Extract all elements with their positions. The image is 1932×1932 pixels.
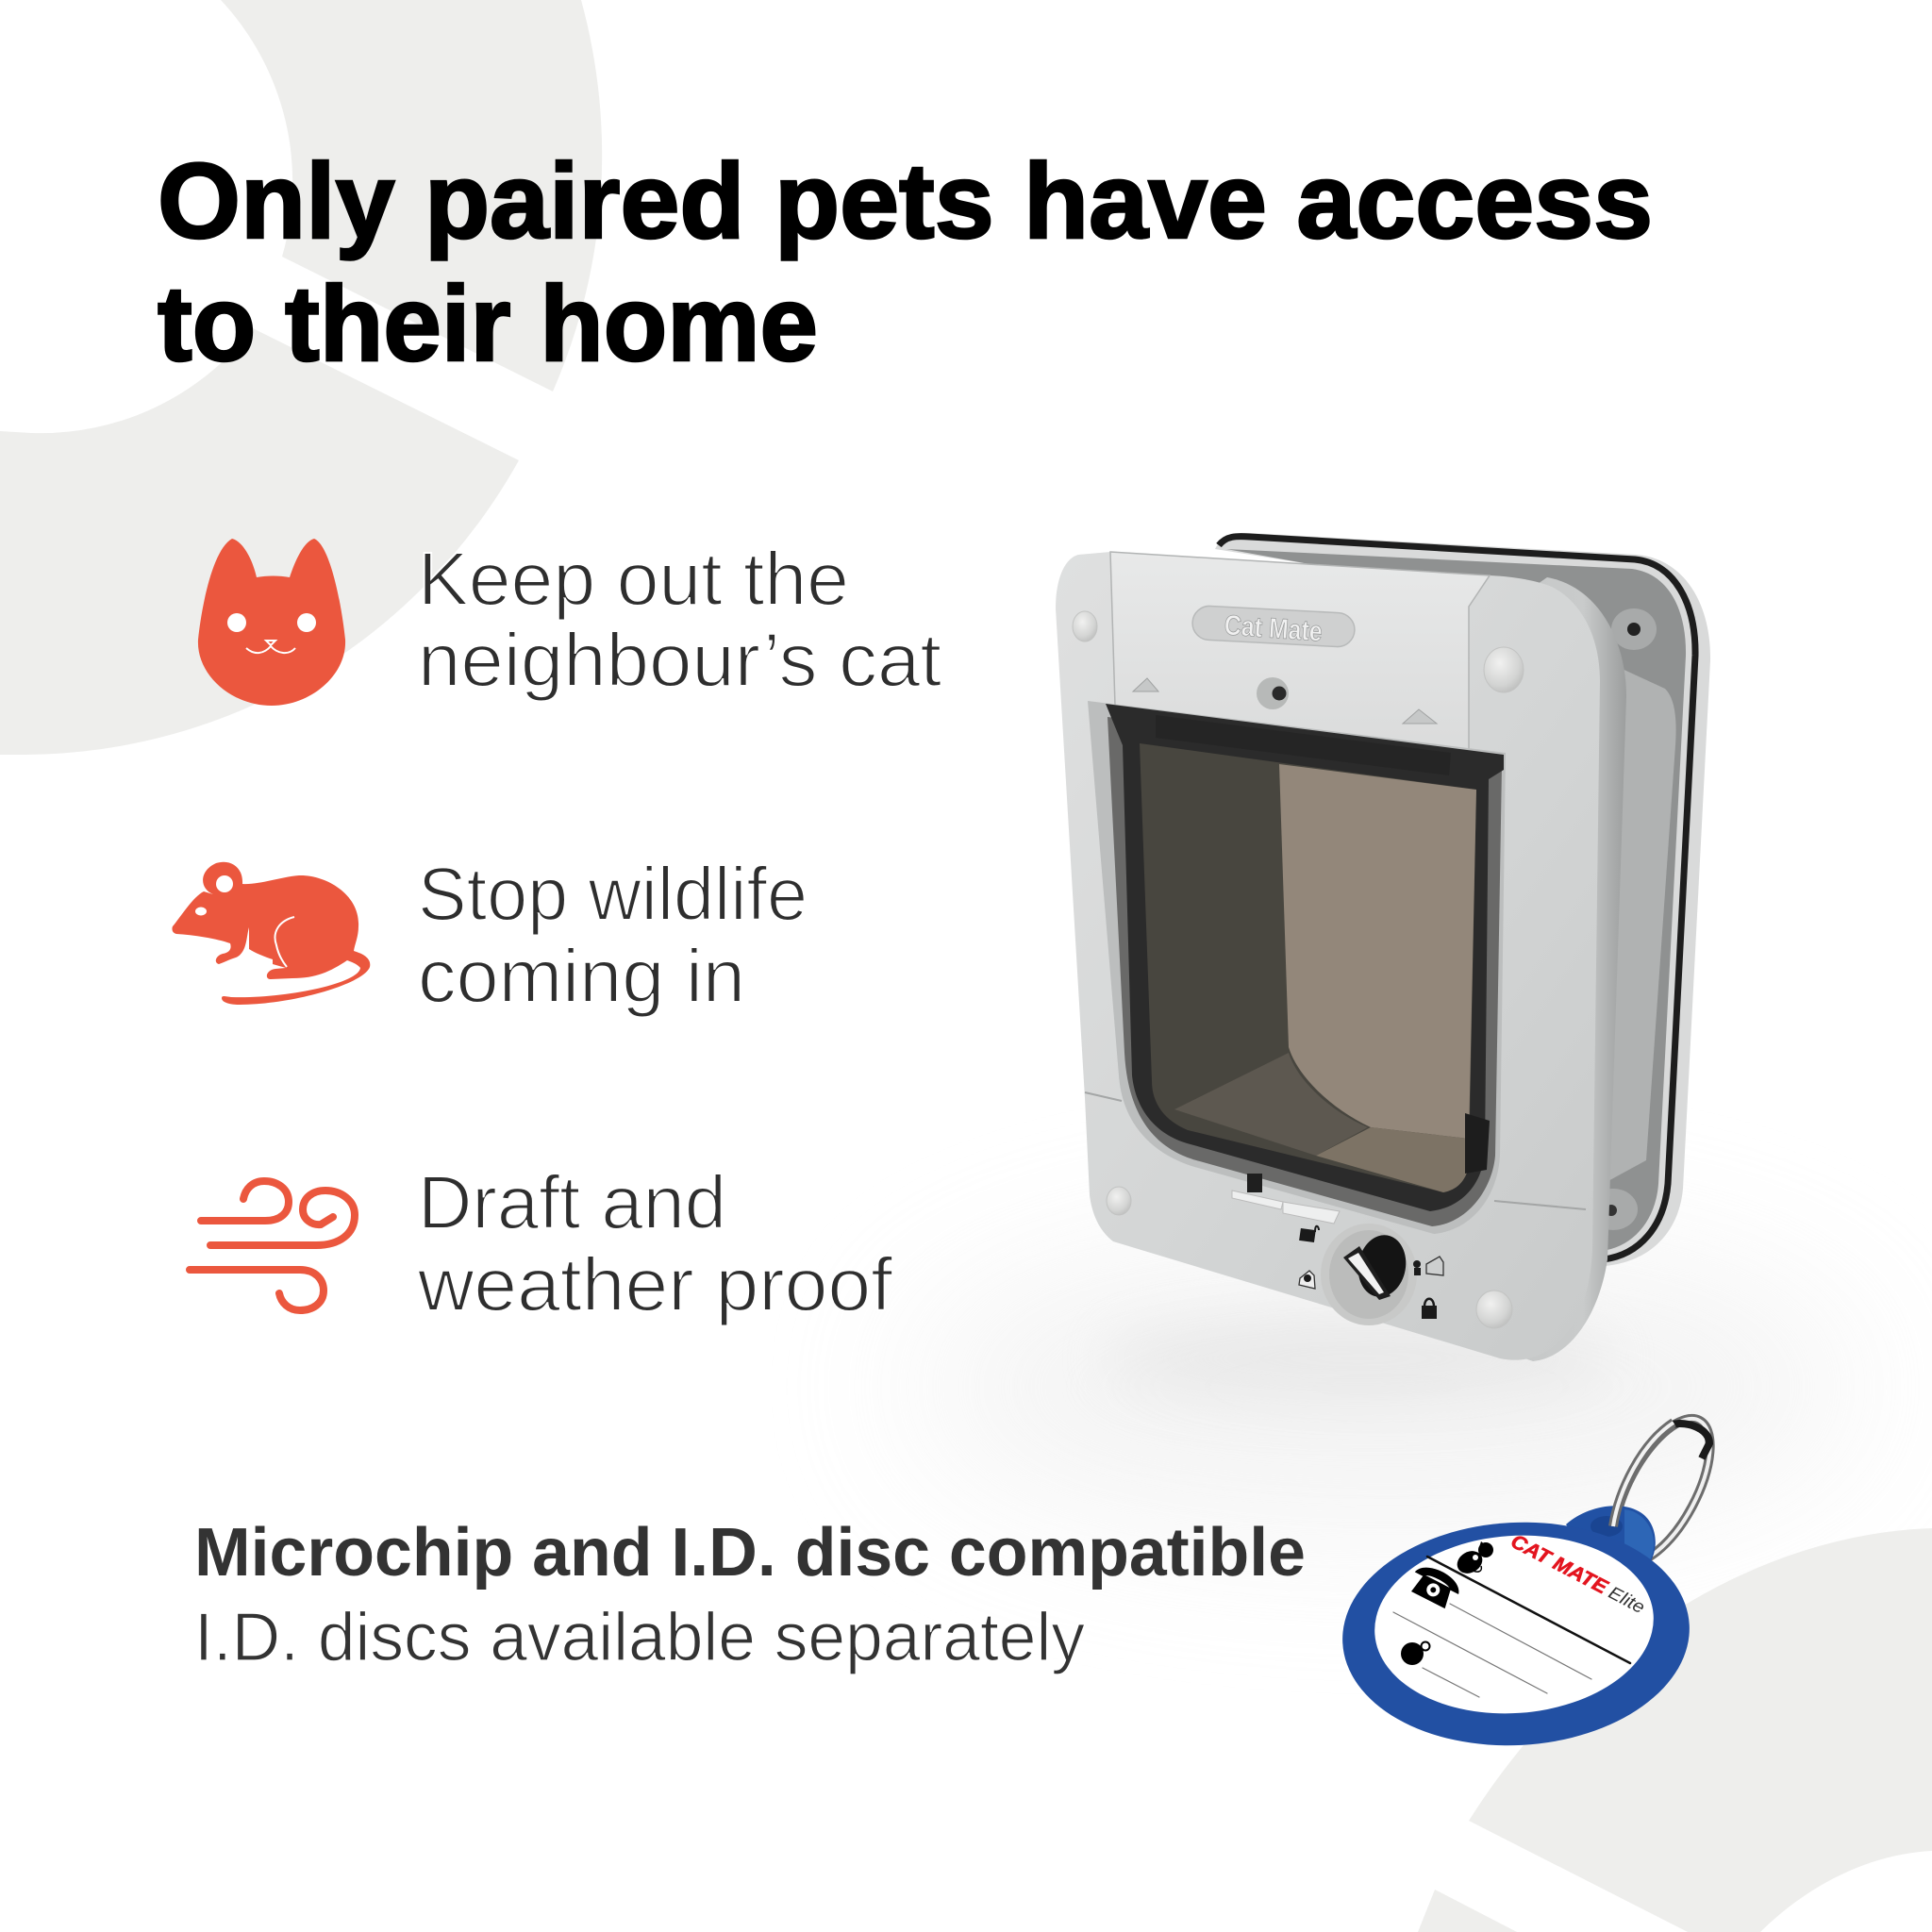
text: stop wildlife: coming in [418, 934, 745, 1018]
disc label [1369, 1526, 1659, 1723]
text: stop wildlife [418, 852, 808, 1018]
ring front [1613, 1423, 1674, 1526]
cat mate logo [1507, 1530, 1649, 1618]
seams [1085, 1092, 1586, 1209]
mode icons [1299, 1226, 1443, 1319]
background shape: bottom-right ring segment [1469, 1528, 1932, 1932]
label icon: phone [1407, 1560, 1464, 1611]
title [158, 142, 1653, 383]
top cap [1110, 552, 1490, 755]
flap interior tan wall [1279, 764, 1476, 1139]
text: microchip: I.D. discs available separately [194, 1600, 1085, 1675]
back tunnel [1594, 660, 1676, 1189]
background: soft product glow [915, 1245, 1858, 1528]
disc tab [1566, 1506, 1656, 1575]
title: Only paired pets have access [158, 142, 1653, 260]
disc body [1337, 1514, 1695, 1754]
text: microchip: Microchip and I.D. disc compatible [194, 1515, 1306, 1591]
flap interior dark [1140, 743, 1476, 1192]
product: cat flap [1056, 533, 1710, 1401]
flap interior floor [1174, 1053, 1368, 1156]
label icon: cat [1453, 1541, 1493, 1578]
arrows on cap [1133, 678, 1437, 724]
opening brush [1108, 717, 1502, 1226]
opening wall [1088, 701, 1506, 1234]
label icon: tag [1401, 1641, 1430, 1665]
text: microchip [194, 1515, 1306, 1675]
text: keep out: Keep out the [418, 537, 849, 621]
mode dial [1321, 1224, 1417, 1325]
text: draft [417, 1160, 893, 1326]
product: id disc [1337, 1405, 1729, 1754]
back plate [1215, 533, 1710, 1266]
logo plate: Cat Mate [1224, 609, 1324, 648]
icon: cat [198, 539, 345, 706]
text: keep out: neighbour’s cat [418, 618, 941, 702]
flap frame [1106, 704, 1504, 1211]
product shadow [1104, 1316, 1613, 1401]
title: to their home [158, 264, 818, 383]
cat mate logo: Elite [1605, 1583, 1648, 1618]
front frame [1056, 552, 1600, 1360]
text: draft: weather proof [417, 1242, 893, 1326]
background shape: top-left ring lower segment [0, 328, 519, 755]
bottom latch [1232, 1191, 1340, 1224]
icon: wind [190, 1181, 355, 1310]
text: stop wildlife: Stop wildlife [418, 852, 808, 936]
back bumps [1611, 608, 1657, 650]
sensor [1257, 677, 1289, 709]
side thickness [1472, 577, 1626, 1361]
key ring [1595, 1405, 1729, 1576]
top bar [1156, 715, 1451, 775]
background shape: bottom wedge [1418, 1890, 1517, 1932]
background shape: top-left ring upper segment [221, 0, 602, 391]
icon: mouse [172, 862, 370, 1005]
flap interior lower right [1316, 1127, 1469, 1192]
text: keep out [418, 537, 941, 702]
screws [1073, 611, 1524, 1328]
cat mate logo: CAT MATE [1507, 1530, 1612, 1599]
text: draft: Draft and [418, 1160, 726, 1244]
side latch [1465, 1113, 1490, 1174]
label lines [1393, 1557, 1630, 1697]
logo plate [1191, 606, 1356, 648]
